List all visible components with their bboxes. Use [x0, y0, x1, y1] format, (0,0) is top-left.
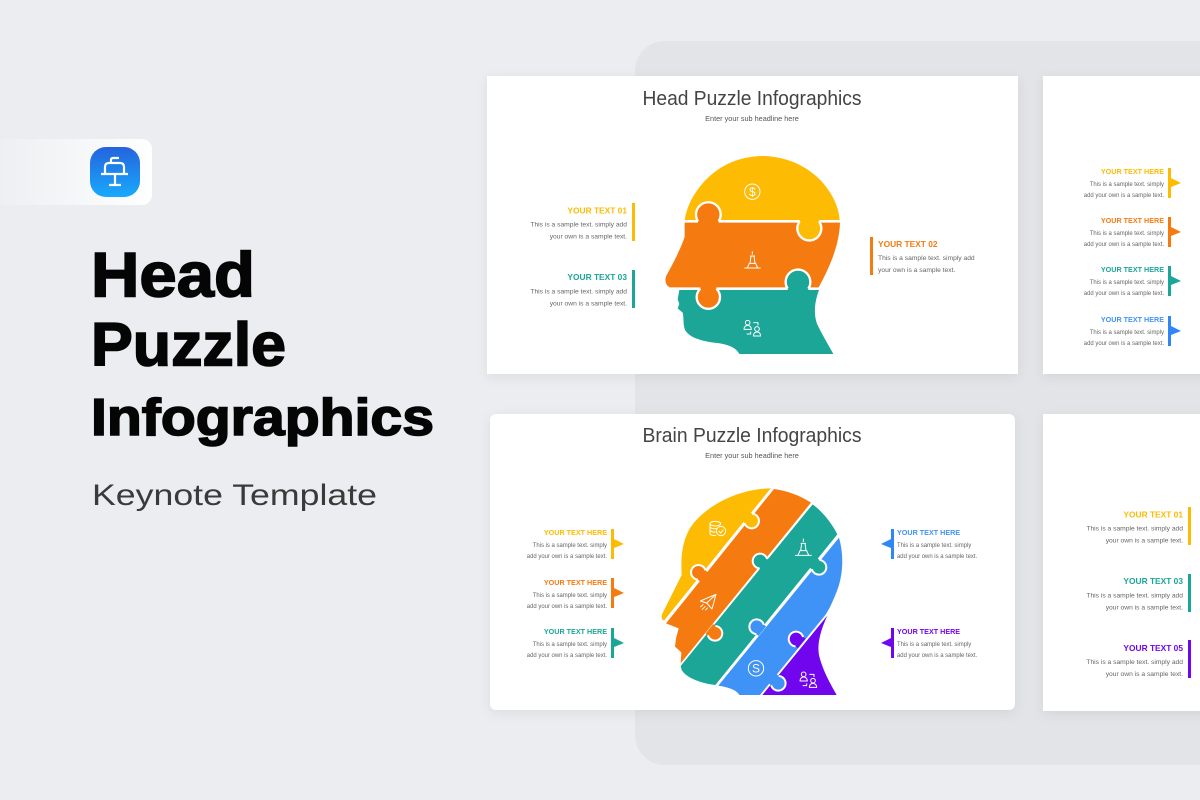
yellow piece — [685, 156, 840, 220]
label: blue: YOUR TEXT HERE — [1101, 315, 1164, 324]
icon: chess piece — [795, 539, 812, 555]
label: purple: add your own is a sample text. — [897, 653, 978, 659]
blue band — [718, 538, 842, 695]
label: purple: This is a sample text. simply — [897, 642, 971, 648]
knob: yellow into orange — [797, 218, 821, 240]
label: text 03: This is a sample text. simply add — [530, 289, 627, 296]
background panel — [635, 41, 1200, 765]
label: orange: YOUR TEXT HERE — [544, 578, 607, 587]
label: text 02: YOUR TEXT 02 — [878, 239, 938, 249]
card subtitle: Enter your sub headline here — [705, 114, 799, 123]
label: orange: add your own is a sample text. — [527, 604, 607, 610]
label: text 02 — [870, 237, 975, 275]
main title: Infographics — [91, 389, 434, 447]
knob: purple into blue — [786, 629, 806, 649]
label: orange — [1084, 216, 1181, 248]
label: yellow — [527, 528, 624, 560]
label: yellow — [1084, 167, 1181, 199]
label: text 03 — [530, 270, 635, 308]
label: orange — [527, 578, 624, 610]
knob: orange into teal — [705, 623, 725, 644]
label: teal — [527, 627, 624, 659]
card subtitle: Enter your sub headline here — [705, 451, 799, 460]
card: head puzzle — [487, 76, 1018, 374]
icon: people exchange — [800, 672, 817, 687]
knob: blue into purple — [768, 673, 789, 694]
knob: teal into orange — [786, 270, 810, 292]
label: text 01: your own is a sample text. — [550, 234, 627, 241]
orange piece — [665, 223, 840, 287]
knob: blue into teal — [746, 616, 767, 637]
card title: Brain Puzzle Infographics — [642, 425, 862, 447]
label: text 05: This is a sample text. simply add — [1086, 659, 1183, 666]
label: yellow: YOUR TEXT HERE — [1101, 167, 1164, 176]
brain puzzle graphic — [662, 488, 842, 695]
label: orange: This is a sample text. simply — [533, 593, 607, 599]
label: blue: add your own is a sample text. — [1084, 341, 1164, 347]
label: text 01: your own is a sample text. — [1106, 538, 1183, 545]
main title: Puzzle — [91, 310, 286, 378]
label: blue: This is a sample text. simply — [1090, 330, 1164, 336]
card: right bottom — [1043, 414, 1200, 711]
label: teal: add your own is a sample text. — [527, 653, 607, 659]
label: blue — [881, 528, 978, 560]
subtitle: Keynote Template — [92, 479, 377, 512]
icon: paper plane — [700, 594, 716, 610]
label: purple — [881, 627, 978, 659]
knob: orange into teal — [697, 286, 720, 309]
orange band — [666, 489, 811, 663]
label: teal: add your own is a sample text. — [1084, 291, 1164, 297]
icon: people exchange — [744, 320, 761, 336]
knob: orange into yellow — [688, 562, 709, 583]
label: text 01: YOUR TEXT 01 — [567, 206, 627, 216]
label: blue: This is a sample text. simply — [897, 543, 971, 549]
card: brain puzzle — [490, 414, 1015, 710]
label: yellow: This is a sample text. simply — [1090, 182, 1164, 188]
label: teal: This is a sample text. simply — [533, 642, 607, 648]
label: yellow: YOUR TEXT HERE — [544, 528, 607, 537]
knob: teal into orange — [750, 551, 770, 571]
label: text 01: This is a sample text. simply add — [530, 222, 627, 229]
label: text 03 — [1086, 574, 1191, 612]
label: text 03: your own is a sample text. — [1106, 605, 1183, 612]
icon: dollar coin — [745, 184, 760, 199]
icon: dollar coin — [748, 661, 764, 676]
label: text 01 — [1086, 507, 1191, 545]
yellow band — [662, 488, 771, 621]
head puzzle graphic — [665, 156, 840, 354]
knob: orange into yellow — [696, 202, 721, 224]
main title: Head — [91, 240, 255, 310]
label: teal: This is a sample text. simply — [1090, 280, 1164, 286]
label: teal: YOUR TEXT HERE — [544, 627, 607, 636]
label: text 03: This is a sample text. simply add — [1086, 593, 1183, 600]
label: orange: add your own is a sample text. — [1084, 242, 1164, 248]
label: yellow: add your own is a sample text. — [527, 554, 607, 560]
label: blue: add your own is a sample text. — [897, 554, 978, 560]
label: text 01 — [530, 203, 635, 241]
label: text 02: This is a sample text. simply add — [878, 255, 975, 262]
label: teal: YOUR TEXT HERE — [1101, 265, 1164, 274]
label: text 03: your own is a sample text. — [550, 301, 627, 308]
purple band — [762, 616, 837, 695]
icon: dollar coin: S — [752, 662, 760, 676]
label: text 01: YOUR TEXT 01 — [1123, 510, 1183, 520]
knob: yellow into orange — [741, 511, 762, 531]
keynote badge — [0, 139, 152, 205]
label: orange: This is a sample text. simply — [1090, 231, 1164, 237]
label: text 05 — [1086, 640, 1191, 678]
label: teal — [1084, 265, 1181, 297]
main title — [91, 240, 434, 447]
label: orange: YOUR TEXT HERE — [1101, 216, 1164, 225]
icon: chess piece — [744, 251, 761, 268]
icon: keynote podium — [90, 147, 140, 197]
teal band — [681, 504, 837, 685]
label: purple: YOUR TEXT HERE — [897, 627, 960, 636]
label: yellow: This is a sample text. simply — [533, 543, 607, 549]
label: text 05: YOUR TEXT 05 — [1123, 643, 1183, 653]
label: blue: YOUR TEXT HERE — [897, 528, 960, 537]
label: text 01: This is a sample text. simply add — [1086, 526, 1183, 533]
card: right top — [1043, 76, 1200, 374]
label: text 05: your own is a sample text. — [1106, 671, 1183, 678]
card title: Head Puzzle Infographics — [642, 88, 862, 110]
label: text 03: YOUR TEXT 03 — [567, 272, 627, 282]
icon: dollar coin: $ — [749, 185, 756, 199]
teal piece — [678, 290, 833, 354]
label: yellow: add your own is a sample text. — [1084, 193, 1164, 199]
label: blue — [1084, 315, 1181, 347]
label: text 02: your own is a sample text. — [878, 267, 955, 274]
knob: teal into blue — [809, 557, 829, 578]
label: text 03: YOUR TEXT 03 — [1123, 576, 1183, 586]
icon: database check — [710, 521, 726, 536]
